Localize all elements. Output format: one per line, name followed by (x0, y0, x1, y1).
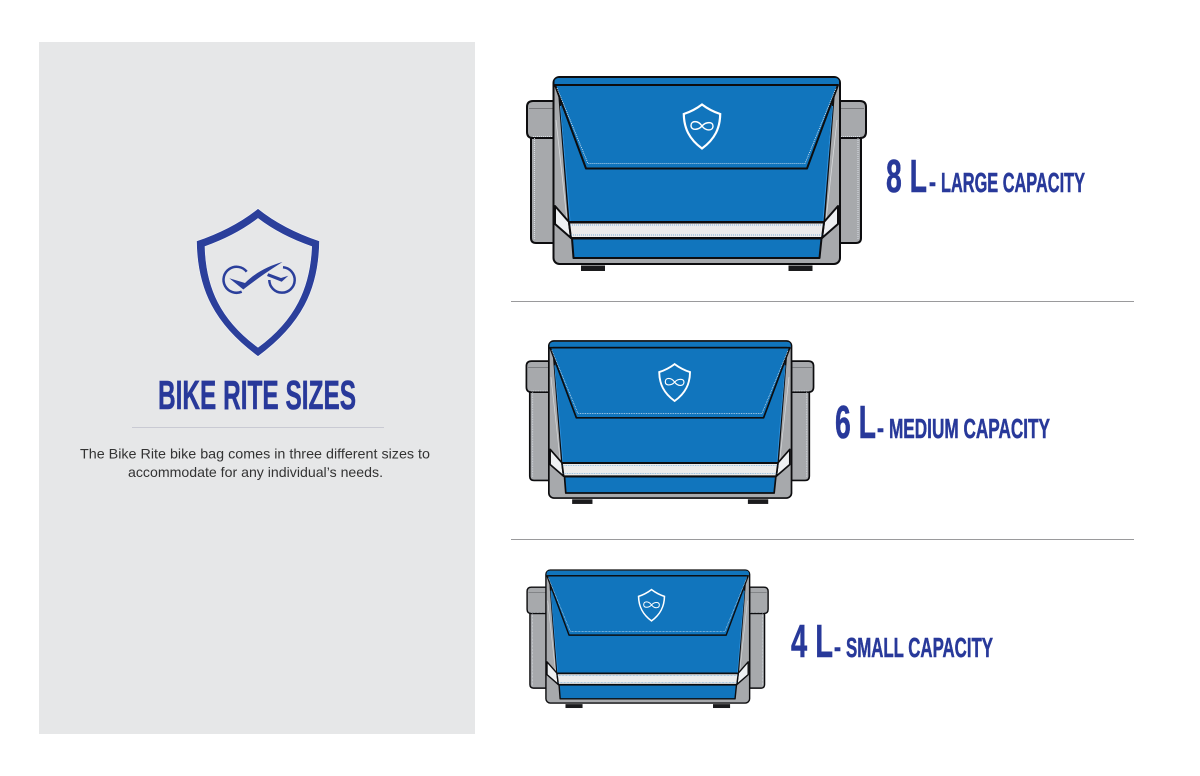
label: 8 L large capacity: 8 L (886, 150, 927, 202)
flap (555, 85, 838, 168)
label: 6 L medium capacity: 6 L (835, 396, 876, 448)
label: 8 L large capacity: - (929, 167, 936, 199)
reflective band (557, 674, 738, 685)
text block: description (80, 446, 430, 480)
bag body (549, 341, 792, 498)
lower blue panel (559, 685, 736, 699)
bag body (554, 77, 840, 264)
feet (572, 499, 768, 504)
label: 6 L medium capacity: - (877, 413, 884, 445)
side handles (527, 101, 866, 243)
heading: Bike Rite Sizes: BIKE RITE SIZES (158, 372, 356, 418)
icon: white shield logo (659, 364, 690, 401)
side handles (527, 587, 768, 688)
icon: white shield logo (639, 590, 664, 621)
side reflective strips (550, 449, 790, 476)
panel: 6 L medium bag illustration (526, 341, 814, 504)
lower blue panel (572, 238, 822, 258)
main blue panel (558, 85, 834, 222)
flap (547, 576, 748, 635)
feet (565, 704, 730, 708)
label: 4 L small capacity (791, 615, 993, 667)
top band (554, 78, 839, 85)
side handles (526, 361, 814, 480)
text block: description: accommodate for any individual’s needs. (128, 464, 383, 480)
panel: brand introduction (39, 42, 475, 734)
bag body (546, 570, 750, 703)
icon: shield logo with bike check (196, 208, 320, 356)
label: 6 L medium capacity (835, 396, 1050, 448)
main blue panel (553, 348, 787, 463)
top band (550, 342, 791, 348)
label: 6 L medium capacity: MEDIUM CAPACITY (889, 413, 1050, 444)
top band (547, 571, 749, 576)
icon: white shield logo (684, 104, 720, 148)
label: 4 L small capacity: SMALL CAPACITY (846, 632, 993, 663)
main blue panel (549, 576, 746, 673)
panel: 8 L large bag illustration (527, 77, 866, 271)
label: 4 L small capacity: - (834, 632, 841, 664)
label: 8 L large capacity (886, 150, 1085, 202)
panel: 4 L small bag illustration (527, 570, 768, 708)
reflective band (569, 222, 824, 238)
feet (581, 266, 812, 271)
flap (550, 348, 790, 418)
side reflective strips (555, 206, 838, 238)
text block: description: The Bike Rite bike bag comes in three different sizes to (80, 446, 430, 462)
reflective band (562, 463, 778, 476)
label: 8 L large capacity: LARGE CAPACITY (941, 167, 1085, 198)
lower blue panel (565, 477, 776, 493)
side reflective strips (547, 662, 748, 685)
label: 4 L small capacity: 4 L (791, 615, 833, 667)
